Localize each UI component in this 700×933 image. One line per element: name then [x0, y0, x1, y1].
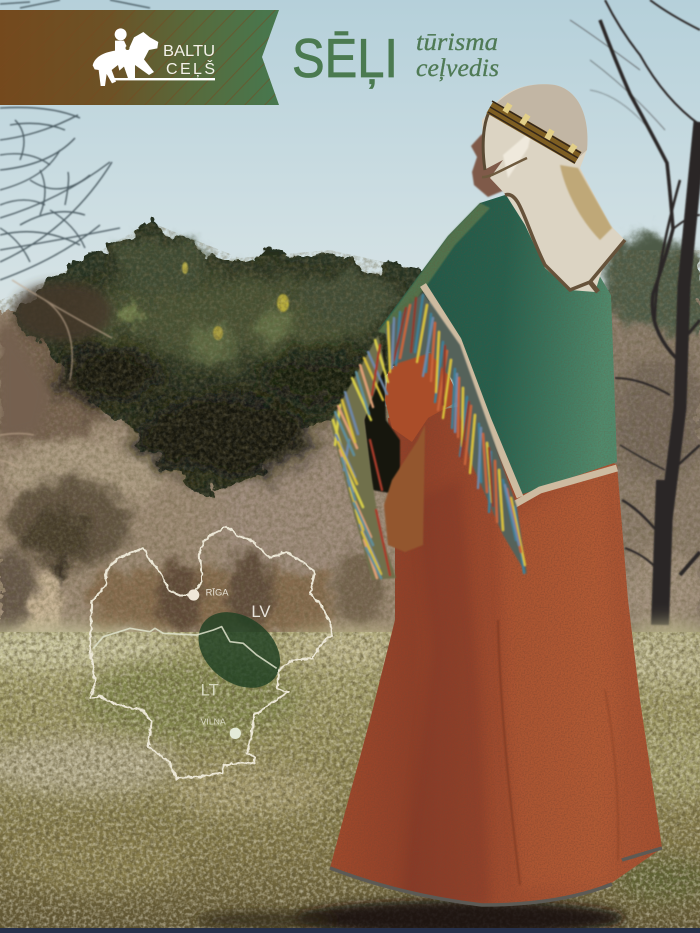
- bare tree on the right: [570, 0, 700, 625]
- logo: rider on horse: [93, 28, 158, 86]
- hem trim: [330, 848, 662, 905]
- hood: [482, 84, 625, 292]
- subtitle line 1: tūrisma: [416, 29, 498, 56]
- background hillside: [0, 220, 700, 650]
- yellow larch highlights: [182, 262, 289, 340]
- sky: [0, 0, 700, 460]
- map: outline: [90, 527, 332, 778]
- forest: [10, 220, 430, 495]
- shawl trim: [423, 285, 617, 507]
- map: Riga point: [188, 589, 199, 601]
- logo text: Ceļš: CEĻŠ: [166, 59, 215, 78]
- fringe: [330, 292, 527, 580]
- bare branches top left: [0, 0, 150, 280]
- label: Vilnius: VILNA: [201, 716, 226, 726]
- map: Vilnius point: [230, 728, 241, 739]
- meadow: [0, 625, 700, 933]
- inner shadow: [364, 345, 400, 495]
- headband: [488, 101, 581, 163]
- face: [471, 128, 505, 197]
- sleeve: [385, 352, 460, 442]
- subtitle line 2: ceļvedis: [416, 55, 499, 82]
- logo line: [112, 78, 215, 80]
- texture over landscape: [0, 220, 700, 632]
- right-hand forest: [605, 232, 700, 332]
- banner stripes: [118, 10, 276, 105]
- map of Latvia and Lithuania: [90, 527, 332, 778]
- label: Riga: RĪGA: [206, 587, 229, 597]
- dress: [320, 400, 670, 910]
- label: LT: LT: [201, 680, 219, 699]
- map: Seli region: [184, 597, 295, 703]
- green shawl: [378, 195, 617, 495]
- title: SĒĻI: [292, 27, 398, 89]
- leather pouch: [384, 425, 425, 552]
- bottom edge strip: [0, 928, 700, 933]
- brown shrubs: [0, 290, 700, 650]
- woman in traditional dress: [320, 84, 670, 910]
- label: LV: LV: [251, 602, 271, 621]
- logo text: Baltu: BALTU: [163, 43, 215, 60]
- map: border between countries: [93, 627, 277, 668]
- banner: [0, 10, 279, 105]
- brown tree on the left: [0, 280, 112, 468]
